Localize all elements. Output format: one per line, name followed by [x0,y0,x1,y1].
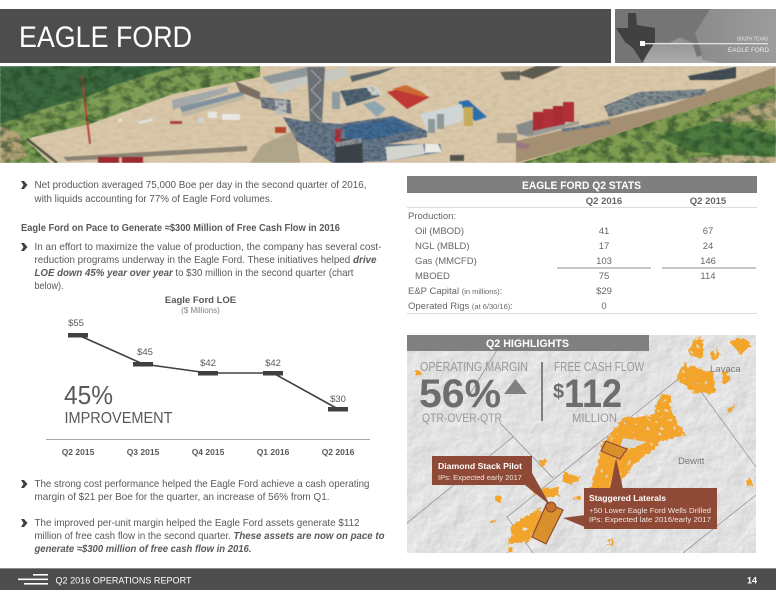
callout: Diamond Stack Pilot: Diamond Stack Pilot [438,461,522,471]
line chart: Eagle Ford LOE: Q4 2015 [192,447,225,457]
icon: up triangle [504,379,527,394]
metric: operating margin: 56% [419,372,501,416]
stats table: 146 [700,256,716,267]
stats table: Operated Rigs (at 6/30/16): [408,301,513,312]
red containers [387,87,430,109]
vegetation left [0,66,260,163]
line chart: Eagle Ford LOE: Q1 2016 [257,447,290,457]
panel: Eagle Ford Q2 stats [407,176,757,314]
bullet text: cash operating margin: The strong cost performance helped the Eagle Ford achieve a cash operating [34,478,370,490]
stats table: $29 [596,286,612,297]
stats table: Oil (MBOD) [415,226,464,237]
metric: operating margin: OPERATING MARGIN [420,360,528,374]
line chart: Eagle Ford LOE: Q3 2015 [127,447,160,457]
icon: footer logo [18,574,48,585]
metric: free cash flow: MILLION [572,411,617,425]
footer label: Q2 2016 OPERATIONS REPORT [56,576,192,586]
heading [407,335,649,351]
stats table: Q2 2016 [586,196,622,207]
stats table: E&P Capital (in millions): [408,286,502,297]
panel: Q2 highlights map [407,335,756,553]
stats table: 75 [599,271,609,282]
panel heading [407,176,757,193]
bullet text: cost reduction: reduction programs underway in the Eagle Ford. These initiatives helped drive [34,254,377,266]
icon: chevron bullet [21,480,28,488]
locator map: South Texas [615,9,776,63]
bullet text: cost reduction [21,241,382,292]
title banner [0,9,611,63]
line chart: Eagle Ford LOE: $30 [330,394,346,405]
locator map: South Texas: SOUTH TEXAS [737,36,768,42]
line chart: Eagle Ford LOE: Q2 2016 [322,447,355,457]
callout: 45% improvement [64,380,173,427]
metric: operating margin [419,360,528,425]
equipment behind rig [332,92,340,109]
metric: free cash flow: FREE CASH FLOW [554,360,644,374]
locator map: South Texas: EAGLE FORD [728,47,769,54]
heading: Q2 HIGHLIGHTS [486,338,569,350]
stats table: 67 [703,226,713,237]
trailers [172,87,228,110]
rig [283,116,442,163]
chart title: Eagle Ford LOE [165,295,236,306]
stats table: 103 [596,256,612,267]
bullet text: cost reduction: In an effort to maximize the value of production, the company has several cost- [34,241,382,253]
bullet text: cash operating margin [21,478,370,503]
line chart: Eagle Ford LOE: Q2 2015 [62,447,95,457]
page number: 14 [747,576,757,586]
road and trucks [63,146,247,161]
callout: 45% improvement: IMPROVEMENT [64,410,173,427]
stats table [407,196,757,314]
metric: free cash flow [553,360,644,425]
stats table: Production: [408,211,456,222]
icon: chevron bullet [21,243,28,251]
bullet text: net production: Net production averaged 75,000 Boe per day in the second quarter of 2016, [34,179,366,191]
bullet text: free cash flow: The improved per-unit margin helped the Eagle Ford assets generate $112 [34,517,360,529]
callout: Staggered Laterals [563,458,717,529]
metric: free cash flow: $ [553,381,564,403]
title: EAGLE FORD [19,21,192,54]
stats table: 41 [599,226,609,237]
icon: chevron bullet [21,181,28,189]
callout: Staggered Laterals: Staggered Laterals [589,493,666,503]
stats table: Gas (MMCFD) [415,256,477,267]
bullet text: cash operating margin: margin of $21 per Boe for the quarter, an increase of 56% from Q1. [34,491,330,503]
bullet text: net production [21,179,366,205]
line chart: Eagle Ford LOE: $55 [68,318,84,329]
well pad markers [532,441,627,544]
stats table: NGL (MBLD) [415,241,470,252]
county labels [678,364,741,467]
bullet text: net production: with liquids accounting for 77% of Eagle Ford volumes. [34,193,272,205]
metric: free cash flow: 112 [564,372,622,416]
callout: Diamond Stack Pilot: IPs: Expected early 2017 [438,475,522,482]
icon: chevron bullet [21,519,28,527]
stats table: Q2 2015 [690,196,727,207]
callout: Staggered Laterals: IPs: Expected late 2016/early 2017 [589,517,711,524]
callout: Staggered Laterals: +50 Lower Eagle Ford Wells Drilled [589,508,711,515]
subheading: Eagle Ford on Pace to Generate ≈$300 Million of Free Cash Flow in 2016 [21,222,340,234]
metric: operating margin: QTR-OVER-QTR [422,411,502,425]
stats table: 24 [703,241,713,252]
stats table: 114 [700,271,716,282]
line chart: Eagle Ford LOE [46,295,370,457]
bullet text: free cash flow: million of free cash flow in the second quarter. These assets are now on pace to [34,530,385,542]
red tanks [533,112,545,132]
stats table: 17 [599,241,609,252]
line chart: Eagle Ford LOE: $45 [137,347,153,358]
road and vegetation right [516,67,776,163]
bullet text: cost reduction: LOE down 45% year over year to $30 million in the second quarter (chart [34,267,354,279]
stats table: MBOED [415,271,450,282]
callout: Diamond Stack Pilot [432,456,550,505]
callout: 45% improvement: 45% [64,380,113,410]
line chart: Eagle Ford LOE: $42 [200,358,216,369]
panel heading: EAGLE FORD Q2 STATS [522,180,641,192]
bullet text: cost reduction: below). [34,280,64,292]
county labels: Lavaca [710,364,741,375]
aerial photo of drilling site [0,66,776,163]
footer bar [0,568,776,590]
county labels: Dewitt [678,456,705,467]
bullet text: free cash flow: generate ≈$300 million of free cash flow in 2016. [34,543,252,555]
line chart: Eagle Ford LOE: ($ Millions) [181,306,220,315]
stats table: 0 [601,301,607,312]
bullet text: free cash flow [21,517,385,555]
acreage blobs [415,337,752,553]
line chart: Eagle Ford LOE: $42 [265,358,281,369]
